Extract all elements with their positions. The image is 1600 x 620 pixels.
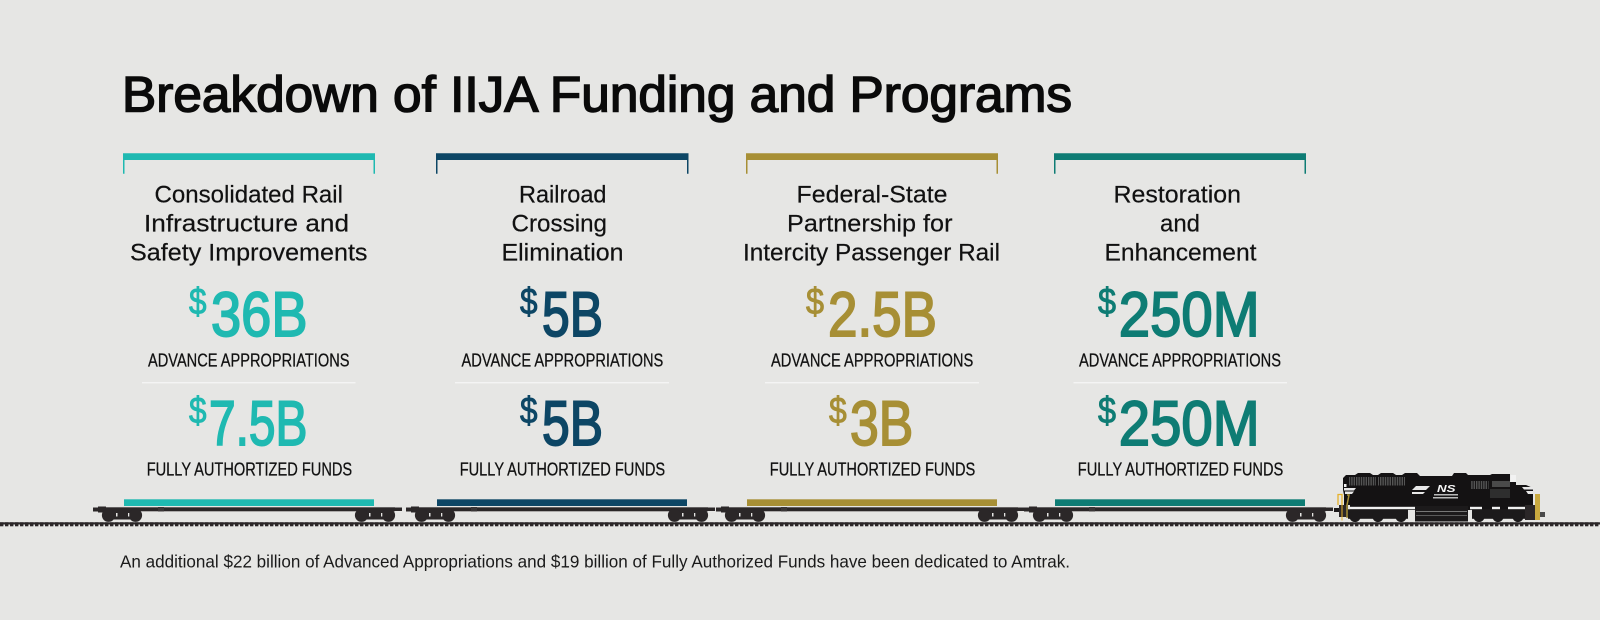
heading: Railroad Crossing Elimination: Crossing	[512, 211, 607, 238]
heading: Railroad Crossing Elimination: Railroad	[519, 182, 606, 209]
heading: Restoration and Enhancement: Restoration	[1114, 182, 1241, 209]
amount: advance appropriations $250M: $	[1098, 281, 1116, 322]
amount: fully authorized $7.5B: $	[189, 390, 206, 431]
amount: fully authorized $5B: $	[520, 390, 538, 431]
long hood and cab	[1343, 473, 1533, 510]
front truck	[1472, 509, 1525, 519]
amount: advance appropriations $5B	[520, 280, 603, 350]
label: fully authorized funds: FULLY AUTHORTIZED FUNDS	[770, 460, 975, 480]
label: advance appropriations: ADVANCE APPROPRIATIONS	[1079, 351, 1281, 371]
amount: fully authorized $250M: $	[1098, 390, 1116, 431]
heading: Consolidated Rail	[130, 182, 368, 267]
flatcar: teal	[93, 499, 402, 522]
railroad track	[0, 522, 1600, 526]
fuel tank	[1415, 506, 1468, 522]
bracket: teal	[123, 153, 375, 174]
heading: Railroad Crossing Elimination: Elimination	[502, 240, 624, 267]
panel: Restoration and Enhancement	[1054, 153, 1306, 480]
amount: fully authorized $3B	[829, 389, 913, 459]
heading: Consolidated Rail: Consolidated Rail	[154, 182, 343, 209]
amount: fully authorized $250M: 250M	[1119, 389, 1260, 459]
bracket: gold	[746, 153, 998, 174]
heading: Federal-State Partnership: Intercity Passenger Rail	[743, 240, 1000, 267]
title: Breakdown of IIJA Funding and Programs	[122, 66, 1072, 122]
label: fully authorized funds: FULLY AUTHORTIZED FUNDS	[147, 460, 352, 480]
label: fully authorized funds: FULLY AUTHORTIZED FUNDS	[460, 460, 665, 480]
heading: Restoration and Enhancement: Enhancement	[1104, 240, 1257, 267]
label: fully authorized funds: FULLY AUTHORTIZED FUNDS	[1078, 460, 1283, 480]
rear truck	[1348, 509, 1408, 519]
panel: Consolidated Rail Infrastructure and Safety Improvements	[123, 153, 375, 480]
amount: fully authorized $3B: $	[829, 390, 847, 431]
label: advance appropriations: ADVANCE APPROPRIATIONS	[148, 351, 350, 371]
walkway stripes	[1350, 507, 1418, 509]
footnote: An additional $22 billion of Advanced Appropriations and $19 billion of Fully Authorized Funds have been dedicated to Amtrak.	[120, 552, 1070, 572]
heading: Federal-State Partnership	[743, 182, 1000, 267]
bracket: navy	[436, 153, 688, 174]
heading: Consolidated Rail: Infrastructure and	[144, 211, 349, 238]
flatcar: gold	[716, 499, 1025, 522]
pilots and couplers	[1334, 508, 1339, 512]
amount: fully authorized $3B: 3B	[850, 389, 913, 459]
amount: fully authorized $5B: 5B	[542, 389, 603, 459]
heading: Federal-State Partnership: Federal-State	[796, 182, 948, 209]
heading: Consolidated Rail: Safety Improvements	[130, 240, 368, 267]
panel: Railroad Crossing Elimination	[436, 153, 688, 480]
amount: fully authorized $5B	[520, 389, 603, 459]
amount: fully authorized $7.5B: 7.5B	[209, 389, 308, 459]
NS logo: NS	[1437, 483, 1456, 495]
flatcar: navy	[406, 499, 715, 522]
amount: fully authorized $7.5B	[189, 389, 308, 459]
heading: Restoration and Enhancement: and	[1160, 211, 1200, 238]
amount: advance appropriations $2.5B: $	[806, 281, 824, 322]
yellow rails	[1338, 494, 1342, 505]
amount: advance appropriations $250M: 250M	[1119, 280, 1260, 350]
heading: Federal-State Partnership: Partnership for	[787, 211, 952, 238]
label: advance appropriations: ADVANCE APPROPRIATIONS	[462, 351, 663, 371]
heading: Railroad Crossing Elimination	[502, 182, 624, 267]
heading: Restoration and Enhancement	[1104, 182, 1257, 267]
flatcar: green	[1024, 499, 1333, 522]
amount: advance appropriations $5B: 5B	[542, 280, 603, 350]
icon: locomotive	[1334, 473, 1545, 522]
label: advance appropriations: ADVANCE APPROPRIATIONS	[771, 351, 973, 371]
white details	[1510, 475, 1516, 482]
amount: advance appropriations $36B: 36B	[211, 280, 308, 350]
amount: advance appropriations $5B: $	[520, 281, 538, 322]
bracket: green	[1054, 153, 1306, 174]
amount: advance appropriations $36B: $	[189, 281, 206, 322]
amount: advance appropriations $2.5B: 2.5B	[828, 280, 937, 350]
panel: Federal-State Partnership for Intercity Passenger Rail	[743, 153, 1000, 480]
